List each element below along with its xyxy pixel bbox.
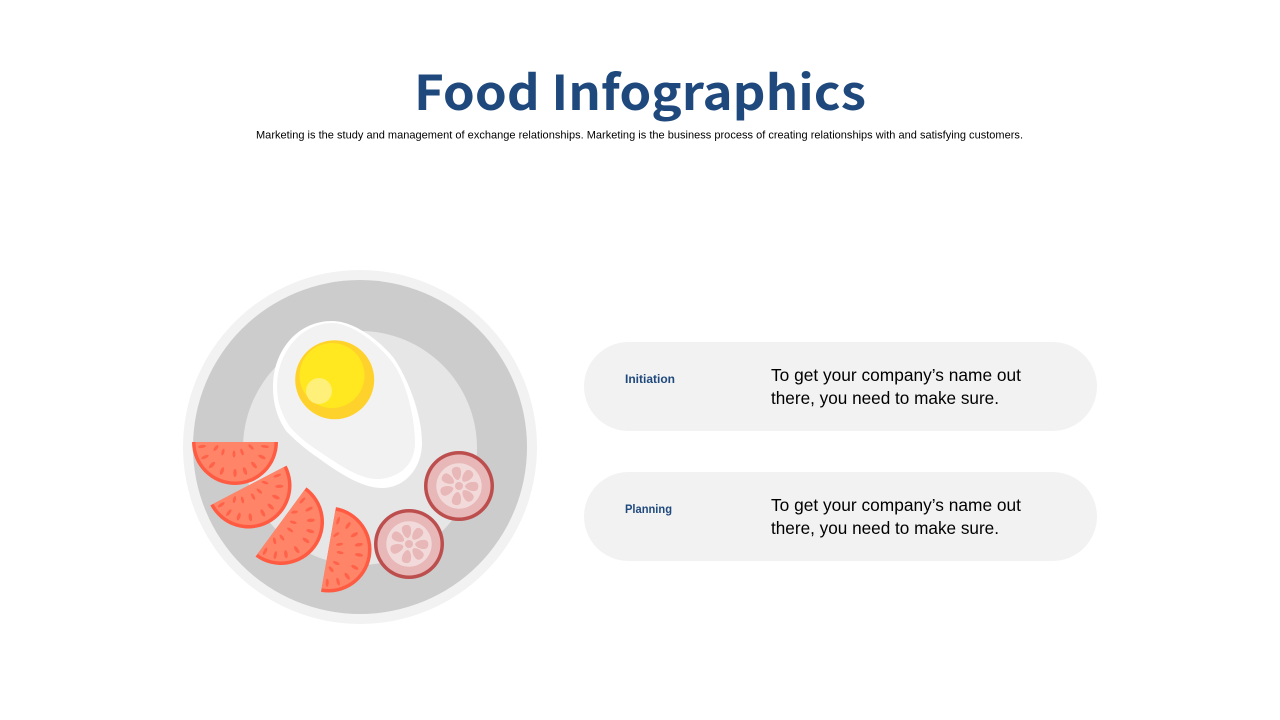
- panel: initiation: [584, 342, 1097, 431]
- text: planning description: To get your company’s name out: [771, 495, 1021, 515]
- text: initiation description: To get your company’s name out: [771, 365, 1021, 385]
- text: planning description: there, you need to make sure.: [771, 518, 999, 538]
- text: initiation description: there, you need to make sure.: [771, 388, 999, 408]
- fried egg: [273, 321, 422, 488]
- plate: [183, 270, 537, 624]
- label: planning: Planning: [625, 504, 672, 516]
- panel: planning: [584, 472, 1097, 561]
- label: initiation: Initiation: [625, 374, 675, 386]
- plate illustration: [183, 270, 537, 624]
- cucumber slices: [374, 451, 494, 579]
- tomato slices: [192, 442, 378, 599]
- subtitle: Marketing is the study and management of exchange relationships. Marketing is the business process of creating relationships with and satisfying customers.: [256, 130, 1023, 142]
- title: Food Infographics: [414, 54, 866, 124]
